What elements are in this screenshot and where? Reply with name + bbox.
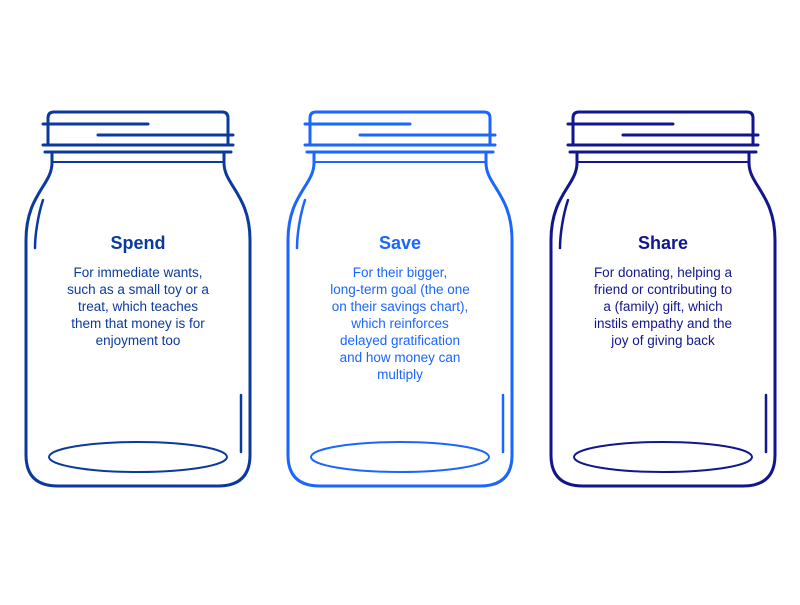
text: save description: which reinforces xyxy=(350,316,449,331)
text: save description: on their savings chart), xyxy=(332,299,468,314)
text: share description: instils empathy and the xyxy=(594,316,732,331)
heading: spend: Spend xyxy=(110,233,166,253)
text: spend description: For immediate wants, xyxy=(73,265,203,280)
heading: share: Share xyxy=(638,233,688,253)
text: save description: delayed gratification xyxy=(340,333,460,348)
text: share description: joy of giving back xyxy=(610,333,715,348)
text: share description: For donating, helping a xyxy=(594,265,733,280)
text: spend description: treat, which teaches xyxy=(78,299,198,314)
text: spend description: them that money is for xyxy=(71,316,205,331)
text: save description: long-term goal (the one xyxy=(330,282,470,297)
heading: save: Save xyxy=(379,233,421,253)
text: share description: a (family) gift, which xyxy=(603,299,723,314)
text: share description: friend or contributing to xyxy=(594,282,732,297)
text: save description: multiply xyxy=(377,367,423,382)
jar: spend xyxy=(26,112,250,486)
jar: save xyxy=(288,112,512,486)
text: save description: For their bigger, xyxy=(353,265,447,280)
text: save description: and how money can xyxy=(340,350,460,365)
text: spend description: enjoyment too xyxy=(96,333,180,348)
jar: share xyxy=(551,112,775,486)
text: spend description: such as a small toy or a xyxy=(67,282,209,297)
